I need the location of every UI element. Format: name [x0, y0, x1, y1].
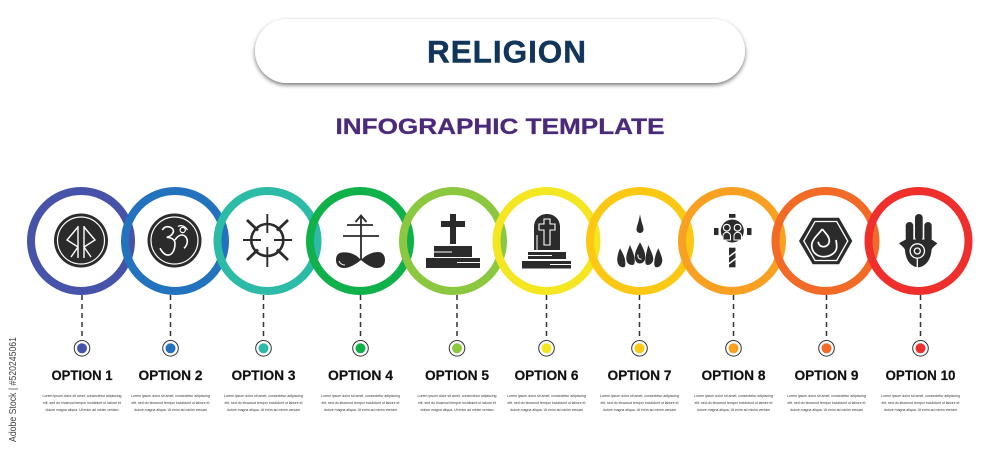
option 1: Lorem ipsum dolor sit amet, consectetur adipiscing [42, 394, 122, 398]
option 7: elit, sed do eiusmod tempor incididunt ut labore et [600, 401, 678, 405]
option 3: elit, sed do eiusmod tempor incididunt ut labore et [224, 401, 302, 405]
icon: grave cross with steps [426, 214, 480, 268]
icon: om symbol [148, 214, 202, 268]
option 6 [507, 295, 586, 412]
option 5: Lorem ipsum dolor sit amet, consectetur adipiscing [418, 394, 496, 398]
option 5: OPTION 5 [425, 368, 489, 383]
option 1 [42, 295, 122, 412]
option 7: Lorem ipsum dolor sit amet, consectetur adipiscing [600, 394, 679, 398]
option 6: Lorem ipsum dolor sit amet, consectetur adipiscing [507, 394, 586, 398]
option 8: OPTION 8 [702, 368, 766, 383]
option 5 [418, 295, 496, 412]
option 3: dolore magna aliqua. Ut enim ad minim veniam [227, 408, 300, 412]
option 3: OPTION 3 [232, 368, 296, 383]
option 8 [694, 295, 773, 412]
option 1: dolore magna aliqua. Ut enim ad minim veniam [46, 408, 118, 412]
option 8: dolore magna aliqua. Ut enim ad minim veniam [697, 408, 770, 412]
option 8: Lorem ipsum dolor sit amet, consectetur adipiscing [694, 394, 773, 398]
option 2: OPTION 2 [138, 368, 202, 383]
option 1: OPTION 1 [52, 368, 113, 383]
option 8: elit, sed do eiusmod tempor incididunt ut labore et [694, 401, 772, 405]
option 10: Lorem ipsum dolor sit amet, consectetur adipiscing [881, 394, 960, 398]
icon: crown of thorns [243, 214, 292, 267]
option 9: dolore magna aliqua. Ut enim ad minim veniam [790, 408, 863, 412]
option 4: dolore magna aliqua. Ut enim ad minim veniam [324, 408, 397, 412]
icon: hamsa hand [899, 214, 937, 268]
option 2: elit, sed do eiusmod tempor incididunt ut labore et [132, 401, 210, 405]
option 5: dolore magna aliqua. Ut enim ad minim veniam [420, 408, 494, 412]
option 10: OPTION 10 [886, 368, 956, 383]
option 9 [787, 295, 866, 412]
icon: RR symbol [54, 214, 108, 268]
option 9: elit, sed do eiusmod tempor incididunt ut labore et [788, 401, 866, 405]
title pill [255, 19, 745, 83]
option 7: OPTION 7 [608, 368, 672, 383]
option 9: OPTION 9 [794, 368, 858, 383]
icon: drop and flames [617, 214, 662, 267]
option 7: dolore magna aliqua. Ut enim ad minim veniam [603, 408, 676, 412]
option 10: dolore magna aliqua. Ut enim ad minim veniam [884, 408, 957, 412]
option 5: elit, sed do eiusmod tempor incididunt ut labore et [418, 401, 496, 405]
icon: tombstone [522, 214, 571, 268]
option 10: elit, sed do eiusmod tempor incididunt ut labore et [882, 401, 960, 405]
option 9: Lorem ipsum dolor sit amet, consectetur adipiscing [787, 394, 866, 398]
option 4 [321, 295, 400, 412]
option 2 [131, 295, 210, 412]
icon: patriarchal cross with infinity [336, 215, 385, 268]
option 10 [881, 295, 960, 412]
stock credit vertical: Adobe Stock | #520245061 [7, 337, 19, 442]
option 6: elit, sed do eiusmod tempor incididunt ut labore et [508, 401, 586, 405]
icon: hexagon with drop [799, 218, 852, 264]
subtitle: INFOGRAPHIC TEMPLATE [336, 114, 664, 139]
option 4: Lorem ipsum dolor sit amet, consectetur adipiscing [321, 394, 400, 398]
option 3 [224, 295, 303, 412]
interlocked rings [31, 191, 968, 291]
option 2: Lorem ipsum dolor sit amet, consectetur adipiscing [131, 394, 210, 398]
icon: ceremonial staff [714, 214, 752, 267]
option 2: dolore magna aliqua. Ut enim ad minim veniam [134, 408, 207, 412]
option 6: dolore magna aliqua. Ut enim ad minim veniam [510, 408, 583, 412]
option 4: elit, sed do eiusmod tempor incididunt ut labore et [322, 401, 400, 405]
option 4: OPTION 4 [328, 368, 394, 383]
option 6: OPTION 6 [514, 368, 579, 383]
title: RELIGION [427, 34, 586, 70]
option 1: elit, sed do eiusmod tempor incididunt ut labore et [43, 401, 121, 405]
option 7 [600, 295, 679, 412]
option 3: Lorem ipsum dolor sit amet, consectetur adipiscing [224, 394, 303, 398]
